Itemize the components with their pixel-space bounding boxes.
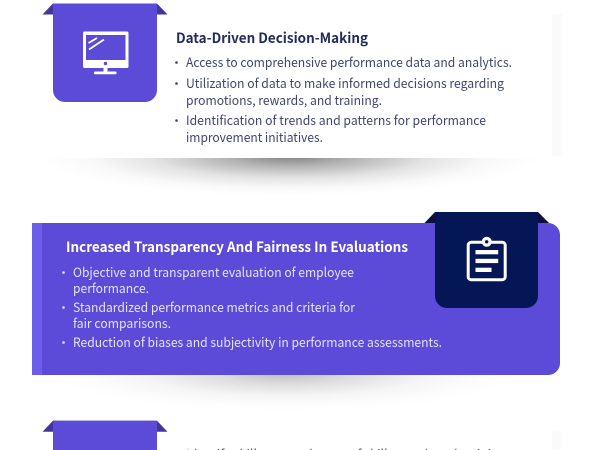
panel: next section, cropped xyxy=(42,421,562,450)
bullet list: data-driven: Access to comprehensive performance data and analytics. xyxy=(186,52,512,71)
panel shadow xyxy=(40,375,540,413)
card background xyxy=(32,223,560,375)
icon ribbon: clipboard xyxy=(424,212,549,308)
bullet list: transparency: Reduction of biases and subjectivity in performance assessments. xyxy=(73,332,442,351)
icon ribbon: cropped xyxy=(42,421,168,450)
bullet list: transparency: Objective and transparent evaluation of employee xyxy=(73,262,354,281)
bullet list: data-driven: Identification of trends and patterns for performance xyxy=(186,110,486,129)
bullet list: transparency: Standardized performance metrics and criteria for xyxy=(73,297,356,316)
bullet list: data-driven xyxy=(175,52,512,146)
bullet list: data-driven: promotions, rewards, and training. xyxy=(186,90,382,109)
heading: transparency: Increased Transparency And Fairness In Evaluations xyxy=(66,237,408,257)
panel: transparency and fairness xyxy=(32,212,560,413)
panel shadow xyxy=(30,158,550,200)
icon ribbon: monitor xyxy=(42,4,168,102)
bullet list: transparency: fair comparisons. xyxy=(73,313,171,332)
bullet list: transparency xyxy=(62,262,442,351)
panel: data-driven decision-making xyxy=(30,4,562,200)
bullet list: transparency: performance. xyxy=(73,278,149,297)
bullet list: data-driven: Utilization of data to make informed decisions regarding xyxy=(186,73,505,92)
heading: data-driven: Data-Driven Decision-Making xyxy=(176,28,369,48)
bullet list: data-driven: improvement initiatives. xyxy=(186,127,323,146)
